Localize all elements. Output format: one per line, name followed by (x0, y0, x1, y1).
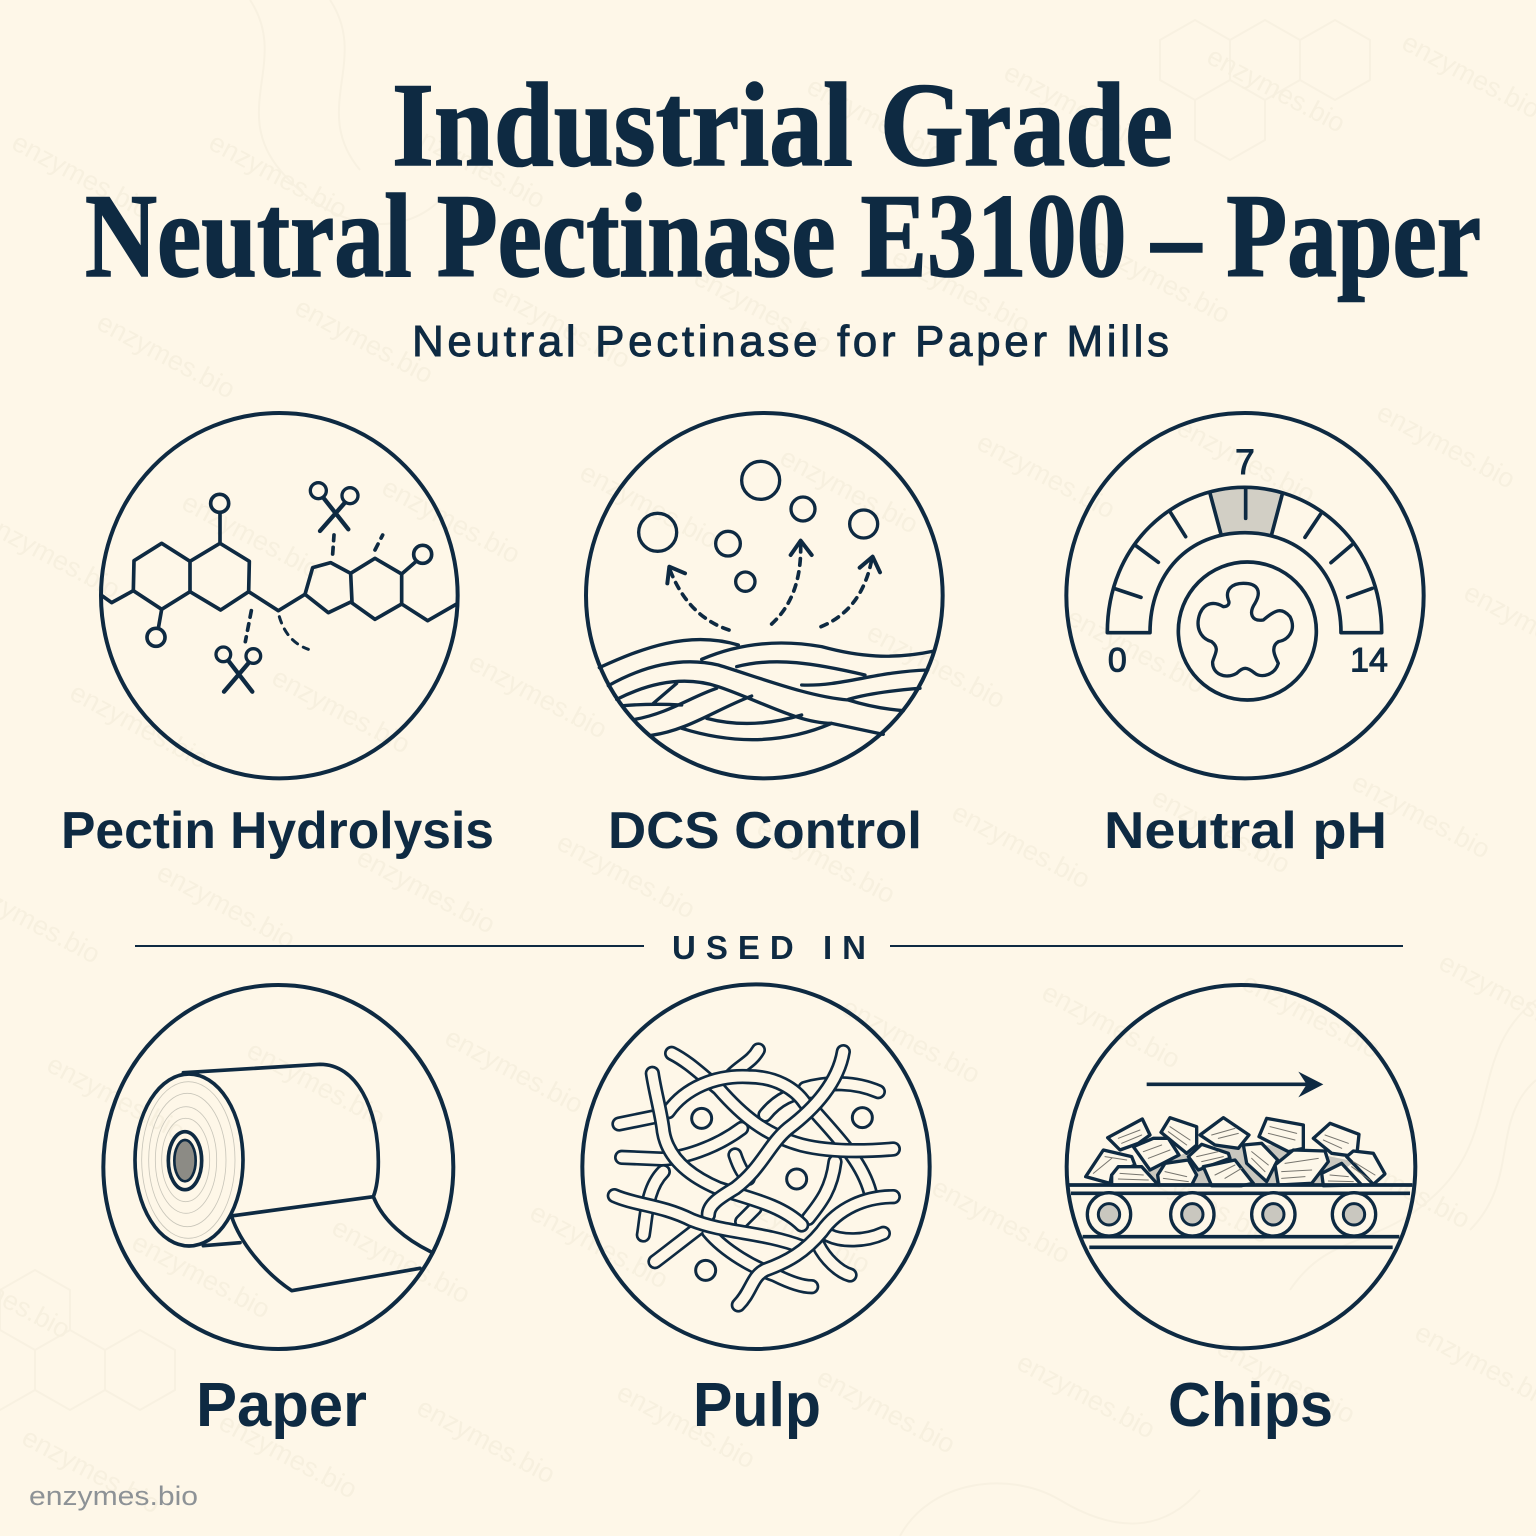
text: enzymes.bio (1172, 412, 1320, 509)
text: enzymes.bio (65, 677, 213, 774)
text: enzymes.bio (242, 1035, 390, 1132)
text: enzymes.bio (42, 1049, 190, 1146)
text: enzymes.bio (440, 1022, 588, 1119)
text: enzymes.bio (377, 472, 525, 569)
text: enzymes.bio (352, 842, 500, 939)
text: enzymes.bio (1347, 767, 1495, 864)
title: Industrial Grade (392, 58, 1173, 191)
text: enzymes.bio (752, 812, 900, 909)
label: chips: Chips (1168, 1371, 1333, 1440)
text: enzymes.bio (612, 1377, 760, 1474)
text: enzymes.bio (1237, 967, 1385, 1064)
label: paper: Paper (196, 1371, 367, 1440)
text: enzymes.bio (1062, 602, 1210, 699)
label: neutral ph: Neutral pH (1104, 802, 1387, 860)
text: enzymes.bio (525, 1197, 673, 1294)
text: enzymes.bio (214, 1407, 362, 1504)
panel: chips (1067, 985, 1415, 1440)
text: enzymes.bio (927, 1172, 1075, 1269)
section divider: used in: USED IN (672, 929, 866, 966)
text: enzymes.bio (837, 992, 985, 1089)
text: enzymes.bio (689, 262, 837, 359)
text: enzymes.bio (152, 857, 300, 954)
text: enzymes.bio (464, 647, 612, 744)
icon: ph gauge with enzyme (1066, 413, 1424, 778)
text: enzymes.bio (1087, 232, 1235, 329)
text: enzymes.bio (267, 662, 415, 759)
text: enzymes.bio (802, 71, 950, 168)
text: enzymes.bio (17, 1422, 165, 1519)
text: enzymes.bio (812, 1362, 960, 1459)
icon: ph gauge with enzyme: 7 (1235, 443, 1255, 482)
text: enzymes.bio (972, 427, 1120, 524)
text: enzymes.bio (177, 487, 325, 584)
icon: ph gauge with enzyme: 14 (1350, 642, 1388, 680)
text: enzymes.bio (402, 117, 550, 214)
text: enzymes.bio (1212, 1332, 1360, 1429)
text: enzymes.bio (290, 292, 438, 389)
text: enzymes.bio (999, 57, 1147, 154)
text: enzymes.bio (412, 1392, 560, 1489)
icon: fibers releasing particles (586, 413, 943, 778)
panel: pulp (582, 984, 930, 1440)
panel: neutral ph (1066, 413, 1424, 860)
text: enzymes.bio (92, 307, 240, 404)
text: enzymes.bio (947, 797, 1095, 894)
panel: paper (103, 985, 453, 1440)
text: enzymes.bio (1327, 1137, 1475, 1234)
text: enzymes.bio (127, 1227, 275, 1324)
text: enzymes.bio (575, 457, 723, 554)
text: enzymes.bio (204, 127, 352, 224)
text: enzymes.bio (1147, 782, 1295, 879)
text: enzymes.bio (7, 127, 155, 224)
label: dcs control: DCS Control (608, 802, 922, 860)
text: enzymes.bio (862, 617, 1010, 714)
icon: paper roll (103, 985, 453, 1349)
text: enzymes.bio (1037, 977, 1185, 1074)
text: enzymes.bio (1202, 41, 1350, 138)
title (85, 58, 1481, 302)
text: enzymes.bio (1372, 397, 1520, 494)
text: enzymes.bio (552, 827, 700, 924)
icon: pectin chain with scissors (101, 413, 458, 778)
text: enzymes.bio (775, 442, 923, 539)
panel: pectin hydrolysis (61, 413, 494, 860)
text: enzymes.bio (727, 1182, 875, 1279)
text: enzymes.bio (1012, 1347, 1160, 1444)
icon: ph gauge with enzyme: 0 (1108, 642, 1127, 680)
text: enzymes.bio (887, 242, 1035, 339)
icon: tangled pulp fibers (582, 984, 930, 1349)
icon: wood chips on conveyor (1067, 985, 1415, 1348)
text: enzymes.bio (1127, 1152, 1275, 1249)
label: pulp: Pulp (693, 1371, 821, 1440)
subtitle: Neutral Pectinase for Paper Mills (412, 317, 1169, 366)
label: pectin hydrolysis: Pectin Hydrolysis (61, 802, 494, 860)
text: enzymes.bio (327, 1212, 475, 1309)
panel: dcs control (586, 413, 943, 860)
under-layer strands (619, 1050, 883, 1287)
brand footer: enzymes.bio (29, 1481, 198, 1511)
text: enzymes.bio (487, 277, 635, 374)
